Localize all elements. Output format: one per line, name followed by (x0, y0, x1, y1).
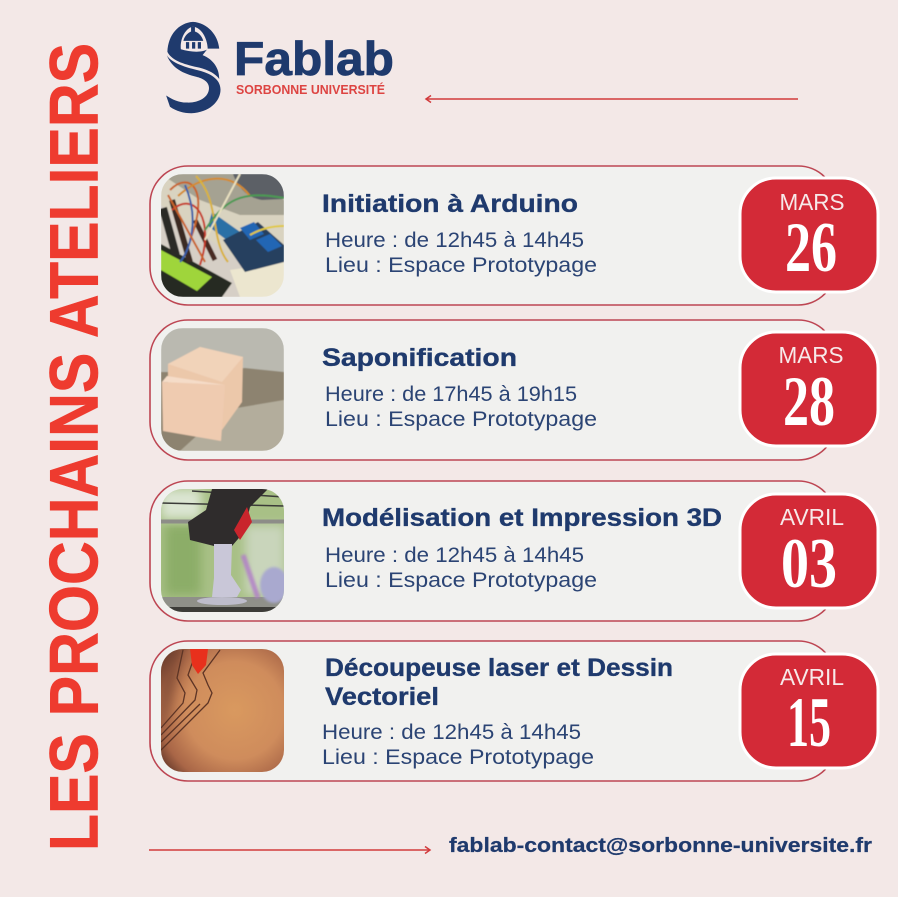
panel: Modélisation et Impression 3D (150, 481, 878, 621)
date badge: 03 (781, 525, 837, 603)
date badge: MARS (778, 342, 844, 368)
hours: Heure : de 12h45 à 14h45 (325, 228, 584, 252)
heading: Initiation à Arduino (322, 190, 578, 218)
panel: Initiation à Arduino (150, 166, 878, 305)
photo: 3D printer (161, 489, 288, 612)
heading: Saponification (322, 344, 517, 372)
card background (150, 481, 836, 621)
date badge (740, 332, 878, 446)
logo: Fablab Sorbonne Université (166, 22, 394, 113)
hours: Heure : de 17h45 à 19h15 (325, 382, 577, 406)
location: Lieu : Espace Prototypage (325, 568, 597, 592)
heading: Modélisation et Impression 3D (322, 504, 722, 532)
wordmark Fablab: Fablab (234, 32, 394, 85)
date badge: 26 (785, 209, 837, 287)
heading: Découpeuse laser et Dessin (325, 654, 673, 682)
photo: Arduino electronics (161, 174, 284, 297)
location: Lieu : Espace Prototypage (325, 407, 597, 431)
heading line 2: Vectoriel (325, 683, 439, 711)
card background (150, 641, 836, 781)
photo: laser cutter (161, 649, 284, 772)
location: Lieu : Espace Prototypage (322, 745, 594, 769)
panel: Découpeuse laser et Dessin Vectoriel (150, 641, 878, 781)
date badge: 28 (783, 363, 835, 441)
card background (150, 166, 836, 305)
hours: Heure : de 12h45 à 14h45 (325, 543, 584, 567)
date badge: AVRIL (780, 664, 844, 690)
contact email: fablab-contact@sorbonne-universite.fr (449, 834, 872, 857)
wordmark Sorbonne Université: SORBONNE UNIVERSITÉ (236, 82, 385, 97)
date badge: AVRIL (780, 504, 844, 530)
date badge (740, 654, 878, 768)
panel: Saponification (150, 320, 878, 460)
card background (150, 320, 836, 460)
photo: soap bars (161, 328, 284, 451)
location: Lieu : Espace Prototypage (325, 253, 597, 277)
date badge: 15 (787, 684, 831, 762)
arrow: bottom (149, 846, 430, 854)
hours: Heure : de 12h45 à 14h45 (322, 720, 581, 744)
date badge: MARS (780, 189, 844, 215)
date badge (740, 494, 878, 608)
arrow: top (426, 96, 798, 102)
date badge (740, 178, 878, 292)
icon: Sorbonne S with dome (166, 22, 221, 113)
